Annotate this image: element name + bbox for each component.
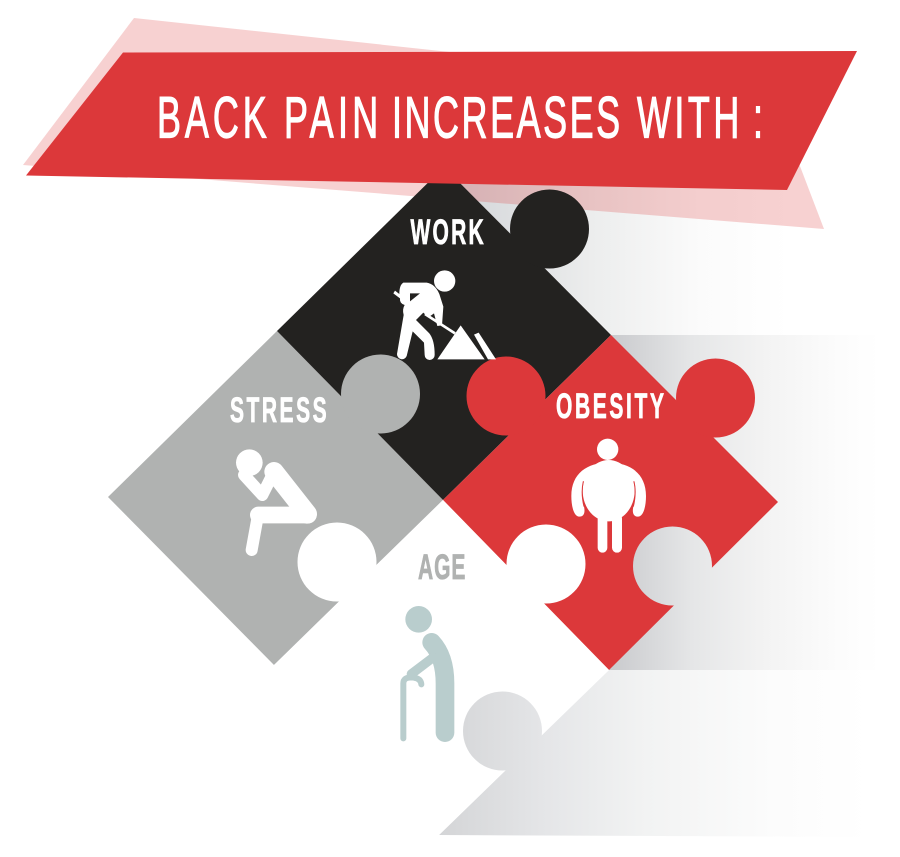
shadow: age piece bbox=[439, 670, 870, 837]
puzzle piece: obesity bbox=[443, 335, 778, 670]
title bbox=[157, 86, 763, 151]
label: stress: STRESS bbox=[230, 392, 327, 430]
label: age: AGE bbox=[418, 549, 465, 587]
shadow: obesity piece bbox=[609, 335, 880, 670]
title: INCREASES bbox=[392, 86, 620, 151]
title: WITH bbox=[637, 86, 739, 151]
label: obesity: OBESITY bbox=[556, 388, 664, 426]
puzzle piece: stress bbox=[108, 331, 443, 665]
label: work: WORK bbox=[410, 214, 484, 252]
title: BACK bbox=[157, 86, 267, 151]
title banner bbox=[26, 51, 857, 190]
puzzle piece: age bbox=[274, 500, 609, 835]
icon: obese person bbox=[571, 439, 646, 553]
icon: stressed seated person bbox=[236, 449, 308, 550]
icon: worker with shovel bbox=[393, 270, 496, 360]
icon: elderly person with cane bbox=[403, 606, 445, 738]
puzzle piece: work bbox=[277, 167, 611, 500]
title: PAIN bbox=[284, 86, 378, 151]
shadow: work piece bbox=[444, 167, 790, 335]
banner shadow: pink ribbon bbox=[23, 18, 824, 229]
title: : bbox=[753, 86, 763, 151]
